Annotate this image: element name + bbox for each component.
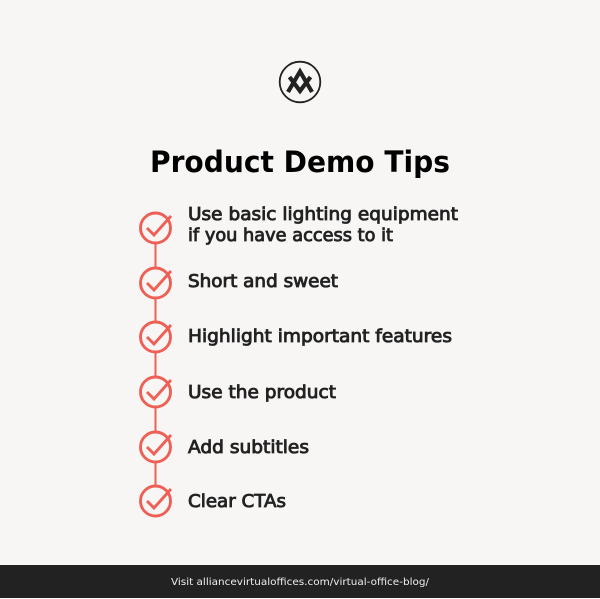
item: short and sweet bbox=[140, 268, 338, 298]
item: add subtitles: Add subtitles bbox=[188, 438, 309, 458]
item: highlight features: Highlight important features bbox=[188, 327, 452, 347]
item: clear CTAs: Clear CTAs bbox=[188, 492, 286, 512]
item: use the product bbox=[140, 377, 336, 407]
item: basic lighting bbox=[140, 205, 458, 246]
footer bar bbox=[0, 565, 600, 598]
item: short and sweet: Short and sweet bbox=[188, 272, 338, 292]
item: basic lighting: Use basic lighting equipment bbox=[188, 205, 458, 225]
item: use the product: Use the product bbox=[188, 383, 336, 403]
item: clear CTAs bbox=[140, 486, 286, 516]
checklist bbox=[140, 205, 458, 516]
icon: logo bbox=[280, 62, 320, 102]
item: highlight features bbox=[140, 322, 452, 352]
footer bar: Visit alliancevirtualoffices.com/virtual-office-blog/ bbox=[171, 577, 430, 588]
title: Product Demo Tips bbox=[150, 145, 450, 179]
item: basic lighting: if you have access to it bbox=[188, 226, 393, 246]
item: add subtitles bbox=[140, 432, 309, 462]
connector lines bbox=[154, 244, 156, 485]
